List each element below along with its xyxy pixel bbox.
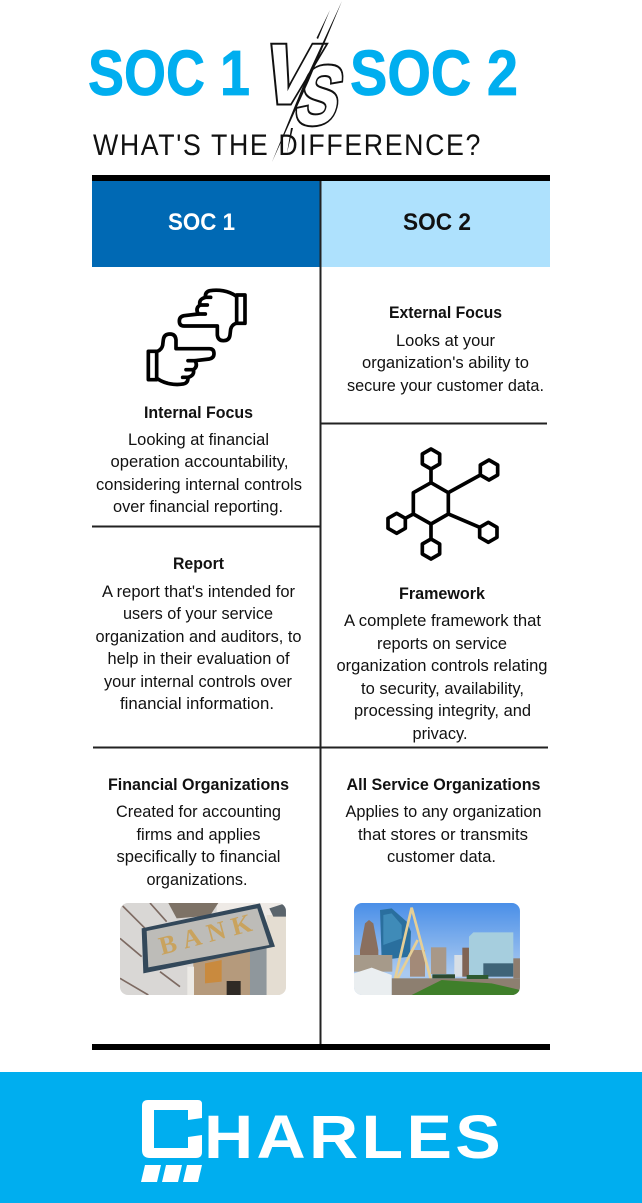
footer band (0, 1072, 642, 1203)
text block: report: help in their evaluation of (108, 650, 290, 668)
text block: financial organizations: firms and applies (136, 826, 260, 844)
text block: financial organizations: Created for accounting (116, 803, 281, 821)
subtitle: WHAT'S THE DIFFERENCE? (93, 129, 482, 162)
text block: report (96, 555, 302, 713)
text block: all service organizations: customer data. (387, 848, 496, 866)
text block: report: organization and auditors, to (96, 628, 302, 646)
text block: external focus: organization's ability to (362, 354, 529, 372)
text block: framework: A complete framework that (344, 612, 541, 630)
table header bar (92, 175, 550, 181)
icon: framing hands (148, 290, 245, 384)
text block: report: users of your service (123, 605, 273, 623)
text block: internal focus (96, 404, 302, 516)
logo blocks (141, 1165, 161, 1182)
VS letter V: V (253, 28, 330, 122)
image: bank sign: BANK (156, 908, 256, 961)
text block: report: A report that's intended for (102, 583, 295, 601)
text block: internal focus: Looking at financial (128, 431, 269, 449)
text block: financial organizations (108, 776, 289, 889)
text block: external focus: External Focus (389, 304, 502, 322)
header: SOC 2: SOC 2 (403, 209, 471, 236)
slash (272, 1, 342, 162)
text block: framework (336, 585, 548, 743)
title (88, 37, 518, 162)
image: city skyline (354, 903, 520, 995)
column divider (320, 181, 322, 1045)
table bottom bar (92, 1044, 550, 1050)
text block: framework: Framework (399, 585, 486, 603)
title: SOC 1: SOC 1 (88, 37, 250, 109)
text block: financial organizations: Financial Organizations (108, 776, 289, 794)
header: SOC 1: SOC 1 (168, 209, 235, 236)
text block: external focus: Looks at your (396, 332, 495, 350)
text block: framework: to security, availability, (361, 680, 524, 698)
text block: all service organizations (346, 776, 542, 866)
logo wordmark: HARLES (204, 1103, 504, 1171)
text block: framework: organization controls relating (336, 657, 548, 675)
text block: framework: processing integrity, and (354, 702, 531, 720)
icon: VS slash badge (253, 1, 353, 162)
text block: all service organizations: All Service Organizations (346, 776, 540, 794)
text block: all service organizations: that stores or transmits (358, 826, 528, 844)
text block: internal focus: Internal Focus (144, 404, 253, 422)
text block: internal focus: over financial reporting. (113, 498, 283, 516)
text block: financial organizations: organizations. (146, 871, 248, 889)
text block: report: your internal controls over (104, 673, 292, 691)
text block: framework: privacy. (412, 725, 468, 743)
VS letter S: S (288, 49, 353, 142)
VS letter S: S (288, 49, 353, 142)
title: SOC 2: SOC 2 (350, 37, 518, 109)
logo mark (142, 1100, 202, 1158)
text block: internal focus: considering internal controls (96, 476, 302, 494)
image: bank sign (120, 903, 286, 995)
logo: Charles (141, 1100, 504, 1182)
text block: external focus: secure your customer data. (347, 377, 544, 395)
text block: internal focus: operation accountability, (110, 453, 288, 471)
header: SOC 2 (321, 181, 550, 267)
text block: external focus (347, 304, 544, 395)
text block: report: financial information. (120, 695, 274, 713)
header: SOC 1 (92, 181, 320, 267)
VS letter V: V (253, 28, 330, 122)
text block: financial organizations: specifically to financial (116, 848, 280, 866)
text block: framework: reports on service (377, 635, 507, 653)
icon: hexagon network (388, 449, 498, 559)
text block: report: Report (173, 555, 224, 573)
text block: all service organizations: Applies to any organization (346, 803, 542, 821)
